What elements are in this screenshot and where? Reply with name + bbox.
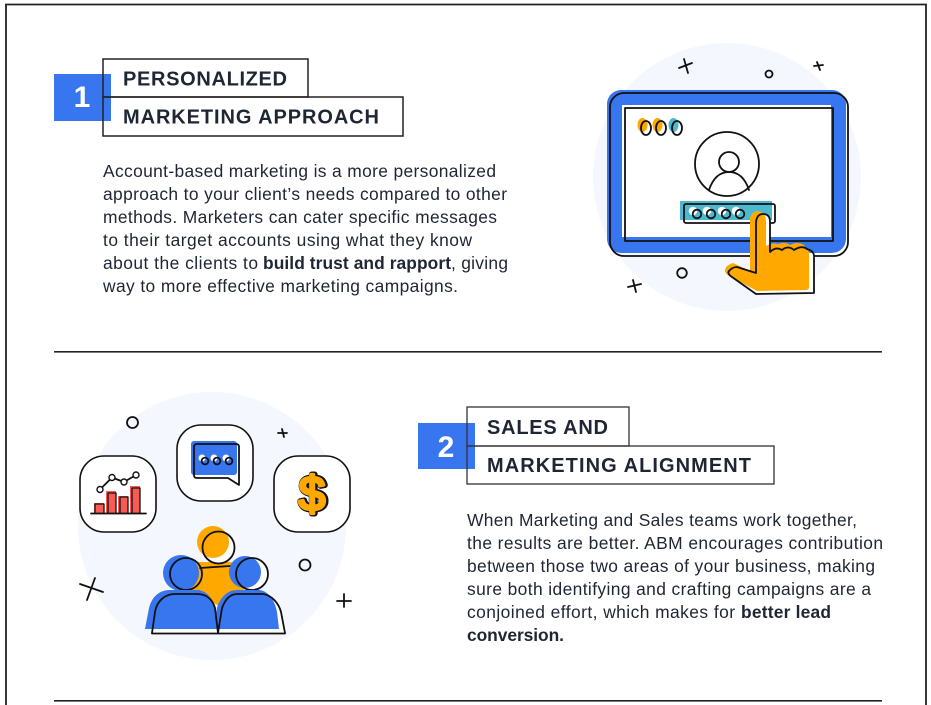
heading line 2: MARKETING ALIGNMENT	[487, 455, 751, 477]
section 1 body text: way to more effective marketing campaigns.	[102, 276, 458, 296]
number 2: 2	[438, 431, 454, 464]
chat card	[177, 425, 253, 501]
team of people	[145, 526, 285, 634]
section 1 body text: Account-based marketing is a more personalized	[103, 161, 496, 181]
section 2 body text	[467, 510, 883, 645]
section 2 body text: conversion.	[467, 625, 564, 645]
section 1 body text: to their target accounts using what they know	[103, 230, 472, 250]
heading line 1: PERSONALIZED	[123, 68, 287, 90]
chart card	[80, 456, 156, 532]
user avatar	[695, 132, 759, 196]
password field	[680, 201, 775, 223]
illustration: team with chart, chat and money icons	[78, 392, 351, 660]
section 1 body text: , giving	[451, 253, 508, 273]
section 2 body text: better lead	[741, 602, 831, 622]
section 1 body text	[102, 161, 508, 296]
window dots	[638, 118, 682, 135]
divider	[54, 351, 882, 353]
section 2 body text: between those two areas of your business, making	[467, 556, 875, 576]
sparkle marks	[80, 417, 351, 607]
section 2 body text: When Marketing and Sales teams work together,	[467, 510, 857, 530]
section 2 body text: the results are better. ABM encourages contribution	[467, 533, 883, 553]
pointing hand	[724, 211, 814, 294]
tablet blue body	[607, 90, 846, 253]
illustration: tablet login with pointing hand	[593, 43, 861, 311]
number 1: 1	[74, 81, 90, 114]
section 1 body text: build trust and rapport	[263, 253, 451, 273]
dollar card	[274, 456, 350, 532]
heading line 1: SALES AND	[487, 417, 608, 439]
dollar card: $	[299, 468, 325, 521]
divider	[54, 700, 882, 702]
sparkle marks	[628, 59, 823, 292]
heading line 2: MARKETING APPROACH	[123, 106, 379, 128]
section 2 heading	[418, 407, 774, 484]
section 2 body text: conjoined effort, which makes for	[467, 602, 735, 622]
section 1 heading	[54, 59, 403, 136]
section 1 body text: approach to your client’s needs compared to other	[103, 184, 507, 204]
section 1 body text: methods. Marketers can cater specific messages	[103, 207, 497, 227]
section 1 body text: about the clients to	[103, 253, 258, 273]
section 2 body text: sure both identifying and crafting campaigns are a	[467, 579, 871, 599]
dollar card: $	[300, 468, 326, 521]
